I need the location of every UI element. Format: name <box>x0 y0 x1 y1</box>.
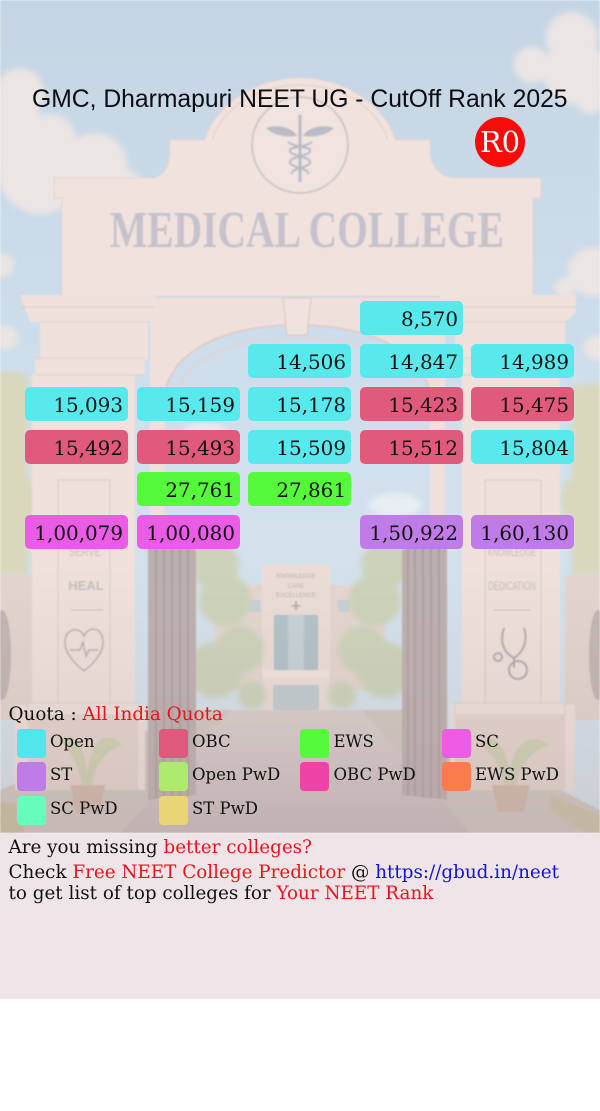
legend: ST PwD <box>159 796 258 825</box>
legend: ST: ST <box>50 765 72 784</box>
rank 1,60,130: 1,60,130 <box>480 522 569 545</box>
predictor link line: Check Free NEET College Predictor @ https://gbud.in/neet <box>8 862 559 883</box>
round badge R0: R0 <box>480 124 520 158</box>
title: GMC, Dharmapuri NEET UG - CutOff Rank 2025 <box>32 86 568 113</box>
legend: Open PwD <box>159 762 280 791</box>
central building: KNOWLEDGE <box>276 574 316 580</box>
trees behind gate <box>0 371 600 575</box>
central building: EXCELLENCE <box>276 593 316 599</box>
rank 15,493 <box>137 430 240 464</box>
panel: college predictor promo <box>0 833 600 999</box>
rank 15,804 <box>471 430 574 464</box>
right pillar: KNOWLEDGE <box>488 547 536 559</box>
rank 15,492: 15,492 <box>53 436 123 460</box>
round badge R0 <box>475 116 525 166</box>
rank 14,506: 14,506 <box>276 351 346 374</box>
right pillar <box>440 295 576 790</box>
rank 1,00,079 <box>25 515 128 549</box>
legend <box>17 729 559 825</box>
upper attic panel <box>54 78 541 296</box>
rank 15,475: 15,475 <box>499 394 569 417</box>
legend: SC <box>442 729 499 758</box>
legend: OBC PwD: OBC PwD <box>334 765 416 784</box>
legend: OBC: OBC <box>192 732 231 751</box>
legend: ST <box>17 762 72 791</box>
rank 27,861: 27,861 <box>276 479 346 502</box>
legend: EWS PwD: EWS PwD <box>475 765 559 784</box>
rank 14,989 <box>471 344 574 378</box>
icon: stethoscope <box>494 628 527 679</box>
cutoff rank grid <box>25 301 574 549</box>
rank 14,847 <box>360 344 463 378</box>
rank 15,492 <box>25 430 128 464</box>
rank 14,506 <box>248 344 351 378</box>
background illustration: medical college gate <box>0 0 600 833</box>
left gate <box>148 520 196 800</box>
kerb stripes <box>550 795 600 833</box>
rank 27,761: 27,761 <box>165 479 235 502</box>
rank 27,761 <box>137 472 240 506</box>
rank 15,493: 15,493 <box>165 436 235 460</box>
rank 15,804: 15,804 <box>499 436 569 460</box>
rank 15,512 <box>360 430 463 464</box>
rank 14,989: 14,989 <box>499 351 569 374</box>
avenue trees <box>187 541 413 709</box>
legend: ST PwD: ST PwD <box>192 798 258 818</box>
rank 15,475 <box>471 387 574 421</box>
rank 15,093: 15,093 <box>53 394 123 417</box>
side buildings <box>0 575 32 720</box>
left pillar: HEAL <box>68 578 104 593</box>
rank 1,00,080 <box>137 515 240 549</box>
legend: OBC PwD <box>300 762 416 791</box>
legend: EWS <box>300 729 374 758</box>
medallion with caduceus <box>252 97 348 193</box>
rank 27,861 <box>248 472 351 506</box>
rank 15,178: 15,178 <box>276 394 346 417</box>
rank 15,512: 15,512 <box>388 436 458 460</box>
left pillar <box>15 295 160 790</box>
rank 1,00,080: 1,00,080 <box>146 522 235 545</box>
rank 14,847: 14,847 <box>388 351 458 374</box>
legend: SC PwD: SC PwD <box>50 798 118 818</box>
icon: heart <box>65 629 103 671</box>
right gate <box>402 520 447 800</box>
rank 1,50,922 <box>360 515 463 549</box>
rank 15,093 <box>25 387 128 421</box>
right pillar: DEDICATION <box>488 579 536 593</box>
promo question: Are you missing better colleges? <box>8 837 312 858</box>
road <box>120 710 470 833</box>
distant clouds in opening <box>183 424 421 517</box>
rank 15,159 <box>137 387 240 421</box>
legend: EWS: EWS <box>334 732 374 751</box>
legend: SC PwD <box>17 796 118 825</box>
rank 15,509: 15,509 <box>276 436 346 460</box>
legend: Open PwD: Open PwD <box>192 765 280 784</box>
rank 1,50,922: 1,50,922 <box>369 522 458 545</box>
rank 1,60,130 <box>471 515 574 549</box>
rank 15,423 <box>360 387 463 421</box>
legend: Open <box>17 729 94 758</box>
legend: OBC <box>159 729 231 758</box>
legend: SC: SC <box>475 732 499 751</box>
rank 15,423: 15,423 <box>388 394 458 417</box>
rank line: to get list of top colleges for Your NEET Rank <box>8 883 433 904</box>
central building <box>215 565 385 710</box>
rank 15,159: 15,159 <box>165 394 235 417</box>
legend: Open: Open <box>50 732 94 751</box>
central building: CARE <box>288 584 304 590</box>
rank 15,178 <box>248 387 351 421</box>
legend: EWS PwD <box>442 762 559 791</box>
rank 8,570: 8,570 <box>401 308 458 331</box>
rank 15,509 <box>248 430 351 464</box>
left pillar: SERVE <box>69 545 101 559</box>
quota line: Quota : All India Quota <box>8 704 223 725</box>
rank 8,570 <box>360 301 463 335</box>
plant pots <box>60 737 550 812</box>
arch <box>150 298 445 530</box>
rank 1,00,079: 1,00,079 <box>34 522 123 545</box>
keystone <box>283 298 311 335</box>
